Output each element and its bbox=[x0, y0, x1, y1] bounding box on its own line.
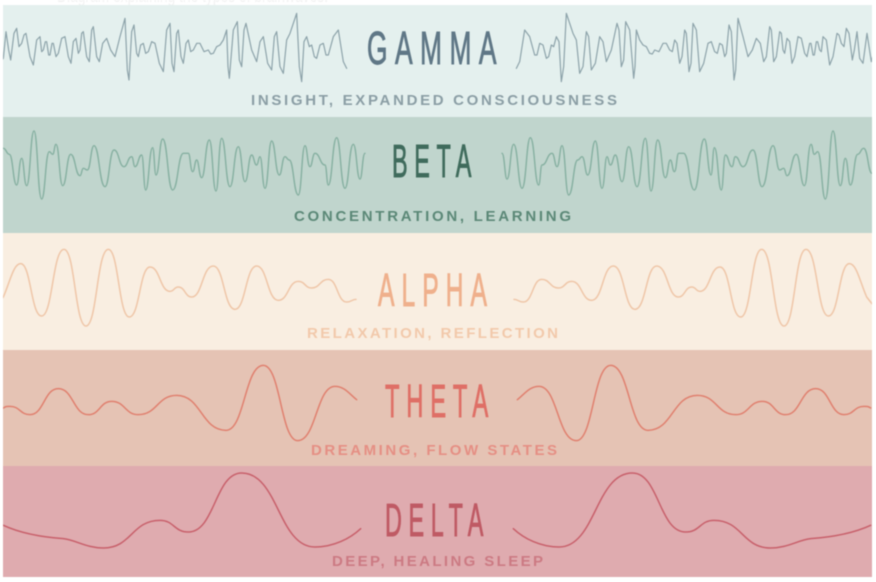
alpha wave left bbox=[0, 249, 356, 326]
gamma wave left bbox=[0, 13, 347, 82]
beta wave left bbox=[0, 131, 365, 199]
alpha title: ALPHA bbox=[378, 264, 494, 316]
gamma title: GAMMA bbox=[367, 22, 504, 74]
delta wave right bbox=[513, 473, 871, 548]
panel: alpha bbox=[0, 233, 875, 350]
panel: delta bbox=[3, 466, 872, 577]
alpha description: RELAXATION, REFLECTION bbox=[307, 325, 558, 342]
beta wave right bbox=[502, 131, 872, 199]
delta title: DELTA bbox=[385, 494, 490, 546]
delta description: DEEP, HEALING SLEEP bbox=[332, 553, 543, 570]
gamma band background bbox=[3, 5, 872, 117]
theta title: THETA bbox=[385, 375, 495, 427]
alpha band background bbox=[3, 233, 872, 350]
beta band background bbox=[3, 117, 872, 233]
theta wave left bbox=[3, 365, 357, 441]
panel: theta bbox=[3, 350, 872, 466]
beta description: CONCENTRATION, LEARNING bbox=[294, 208, 571, 225]
theta band background bbox=[3, 350, 872, 466]
delta wave left bbox=[3, 473, 361, 548]
gamma wave right bbox=[516, 13, 876, 82]
panel: gamma bbox=[0, 5, 876, 117]
theta wave right bbox=[517, 365, 871, 441]
gamma description: INSIGHT, EXPANDED CONSCIOUSNESS bbox=[251, 92, 617, 109]
panel: beta bbox=[0, 117, 872, 233]
theta description: DREAMING, FLOW STATES bbox=[311, 442, 557, 459]
delta band background bbox=[3, 466, 872, 577]
alpha wave right bbox=[514, 249, 875, 326]
beta title: BETA bbox=[392, 135, 478, 187]
